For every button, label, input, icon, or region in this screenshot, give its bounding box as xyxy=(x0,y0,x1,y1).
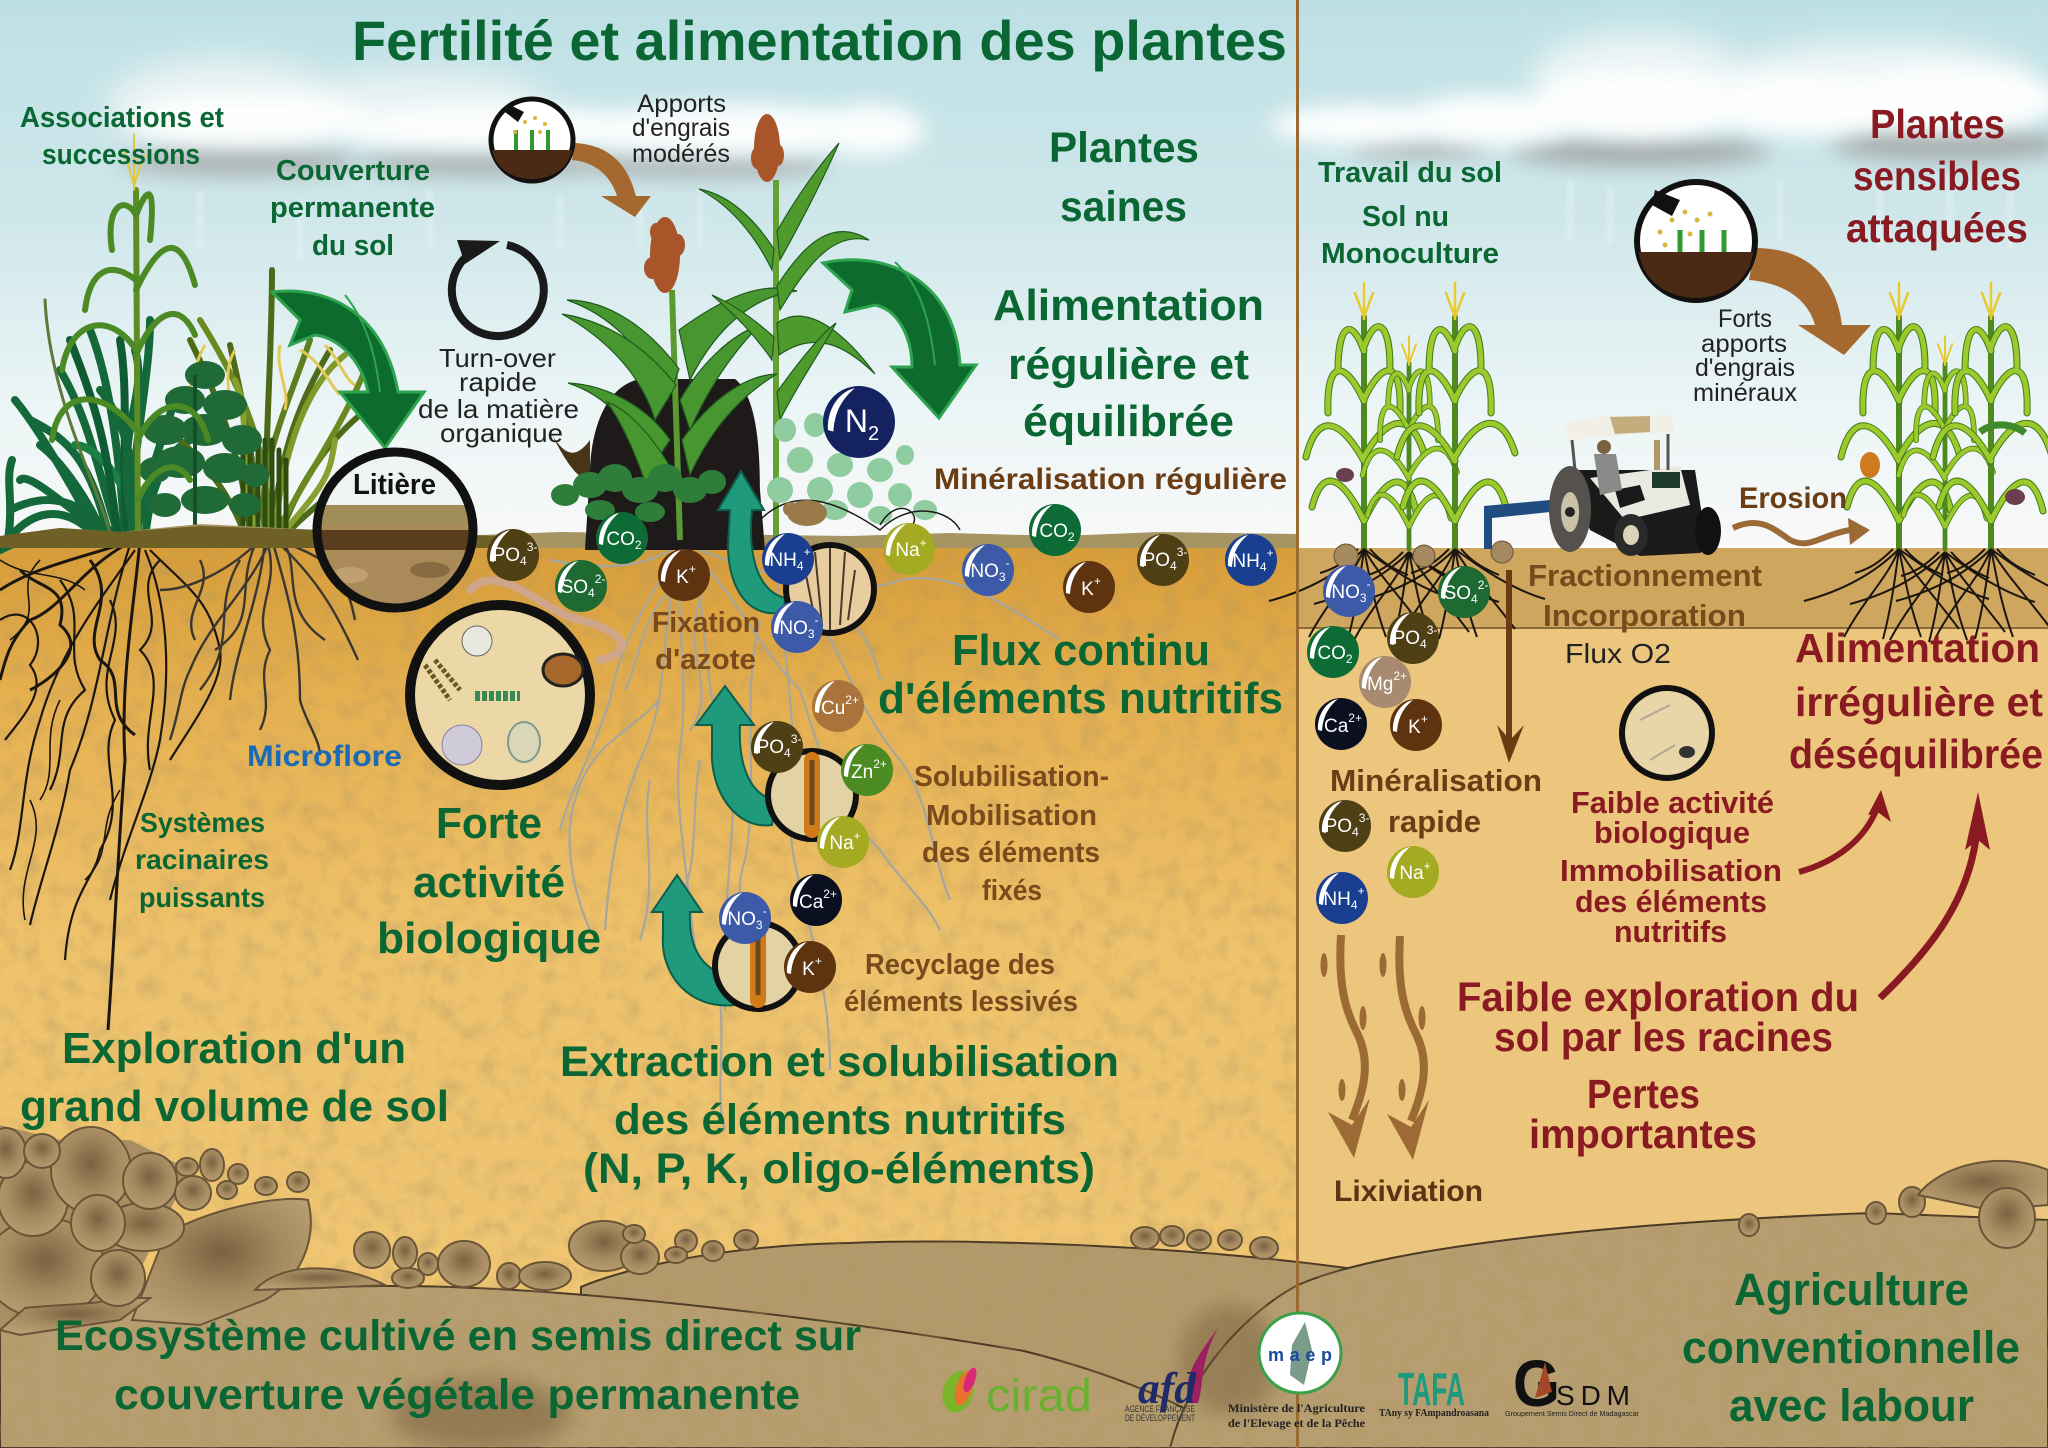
molecule PO4: 3- xyxy=(1177,545,1187,559)
heading: weak exploration xyxy=(1457,974,1859,1060)
label: solubilisation: fixés xyxy=(982,875,1042,907)
label: root systems: Systèmes xyxy=(140,807,265,838)
label: oxygen flux: Flux O2 xyxy=(1565,638,1671,669)
molecule Cu xyxy=(812,680,864,732)
molecule SO4 xyxy=(555,560,607,612)
molecule Na: Na xyxy=(829,833,854,854)
molecule K right xyxy=(1390,699,1442,751)
root circle middle xyxy=(768,751,856,839)
root circle bottom xyxy=(715,923,801,1009)
heading: continuous flux: d'éléments nutritifs xyxy=(878,674,1283,723)
molecule Cu: 2+ xyxy=(845,693,859,707)
turn-over cycle arrow xyxy=(452,240,544,336)
heading: direct seeding ecosystem xyxy=(55,1312,861,1419)
heading: irregular feeding: irrégulière et xyxy=(1795,679,2043,725)
label: weak biological activity: nutritifs xyxy=(1614,914,1727,949)
rain streaks xyxy=(200,175,2010,260)
molecule K: + xyxy=(815,954,822,968)
heading: conventional agriculture xyxy=(1682,1264,2020,1431)
molecule Ca right: Ca xyxy=(1324,716,1348,737)
logo afd xyxy=(1125,1328,1218,1423)
soil background right xyxy=(1297,548,2048,1448)
heading: conventional agriculture: Agriculture xyxy=(1734,1264,1969,1315)
arrow green litter fall xyxy=(272,291,424,448)
label: nitrogen fixation: Fixation xyxy=(652,607,760,639)
molecule K: K xyxy=(802,959,815,980)
label: erosion: Erosion xyxy=(1739,482,1847,515)
label: solubilisation: Solubilisation- xyxy=(914,761,1109,793)
molecule PO4 xyxy=(751,721,803,773)
molecule N2 xyxy=(823,386,895,458)
heading: sensitive plants: sensibles xyxy=(1853,153,2021,199)
soil texture left xyxy=(0,545,1297,1448)
molecule K: + xyxy=(1094,574,1101,588)
logo maep xyxy=(1259,1313,1341,1393)
molecule NO3 right: NO xyxy=(1331,582,1360,603)
label: rapid mineralisation xyxy=(1330,763,1542,839)
molecule NO3 right xyxy=(1323,565,1375,617)
label: soil cover: du sol xyxy=(312,230,394,262)
label: tillage effects xyxy=(1528,558,1762,633)
label: moderate fertiliser xyxy=(632,90,730,168)
molecule K xyxy=(784,941,836,993)
litter circle xyxy=(313,452,477,625)
label: root systems: racinaires xyxy=(135,844,269,875)
label: weak biological activity: biologique xyxy=(1594,815,1750,850)
heading: major losses xyxy=(1529,1071,1757,1157)
molecule NH4 xyxy=(1225,534,1277,586)
label: turn-over: de la matière xyxy=(418,394,579,424)
molecule PO4: 3- xyxy=(791,732,801,746)
label: tillage: Sol nu xyxy=(1362,201,1449,233)
molecule Ca right xyxy=(1315,698,1367,750)
label: tillage effects: Incorporation xyxy=(1543,598,1746,633)
molecule NH4: 4 xyxy=(797,559,804,573)
molecule NO3: NO xyxy=(779,618,808,639)
molecule SO4 right xyxy=(1438,566,1490,618)
heading: healthy plants: Plantes xyxy=(1049,124,1199,172)
molecule PO4: 3- xyxy=(527,540,537,554)
molecule CO2 right: CO xyxy=(1317,643,1346,664)
molecule K: K xyxy=(676,567,689,588)
label: weak biological activity xyxy=(1560,785,1782,949)
logo cirad: cirad xyxy=(986,1369,1092,1421)
molecule SO4 right: 2- xyxy=(1478,578,1488,592)
heading: soil exploration: Exploration d'un xyxy=(62,1024,406,1073)
molecule Zn: 2+ xyxy=(873,757,887,771)
grey roots centre xyxy=(550,545,1060,1130)
molecule CO2 xyxy=(1029,504,1081,556)
label: heavy fertiliser: apports xyxy=(1701,330,1787,358)
heading: soil exploration xyxy=(20,1024,449,1131)
molecule Ca xyxy=(790,874,842,926)
label: microflora: Microflore xyxy=(247,740,402,773)
root circle top xyxy=(786,545,874,633)
molecule PO4 right xyxy=(1387,612,1439,664)
molecule SO4: 4 xyxy=(588,586,595,600)
logo cirad xyxy=(938,1366,1092,1421)
molecule K right: K xyxy=(1408,717,1421,738)
logo GSDM: G xyxy=(1513,1346,1560,1420)
heading: major losses: Pertes xyxy=(1587,1071,1700,1117)
molecule PO4 right: 3- xyxy=(1427,623,1437,637)
molecule CO2 xyxy=(596,512,648,564)
label: nitrogen fixation: d'azote xyxy=(655,644,756,676)
molecule Ca: 2+ xyxy=(823,887,837,901)
heading: conventional agriculture: conventionnelle xyxy=(1682,1322,2020,1373)
molecule Ca right: 2+ xyxy=(1348,711,1362,725)
molecule K right: + xyxy=(1421,712,1428,726)
sorghum leaves front xyxy=(562,288,797,500)
molecule SO4: 2- xyxy=(595,572,605,586)
molecule PO4 right: 4 xyxy=(1420,637,1427,651)
molecule NO3 xyxy=(962,544,1014,596)
insects on maize xyxy=(1336,425,2025,505)
molecule NH4: + xyxy=(804,545,811,559)
root system left xyxy=(0,540,221,1030)
molecule PO4 right lower: 4 xyxy=(1352,825,1359,839)
tractor xyxy=(1484,415,1721,556)
heading: irregular feeding: déséquilibrée xyxy=(1789,731,2043,777)
maize group right field xyxy=(1269,283,1545,642)
molecule Cu: Cu xyxy=(821,698,845,719)
soil background left xyxy=(0,540,1297,1448)
molecule SO4 right: SO xyxy=(1444,583,1471,604)
heading: extraction: Extraction et solubilisation xyxy=(560,1038,1119,1086)
grass tuft left xyxy=(0,300,190,550)
molecule NO3 xyxy=(771,601,823,653)
label: weak biological activity: Faible activité xyxy=(1571,785,1774,820)
molecule NO3 xyxy=(719,892,771,944)
molecule PO4: 4 xyxy=(784,746,791,760)
label: associations: successions xyxy=(42,139,200,171)
label: rapid mineralisation: rapide xyxy=(1388,804,1481,839)
cloud left xyxy=(105,57,925,177)
label: soil cover xyxy=(270,155,435,262)
label: turn-over: rapide xyxy=(459,367,537,397)
heading: healthy plants: saines xyxy=(1060,183,1187,231)
label: weak biological activity: des éléments xyxy=(1575,884,1767,919)
molecule Na right lower: Na xyxy=(1399,863,1424,884)
molecule Zn: Zn xyxy=(851,762,873,783)
label: litter: Litière xyxy=(353,469,436,501)
sorghum panicle rear xyxy=(751,114,784,182)
molecule NO3: 3 xyxy=(999,570,1006,584)
label: rapid mineralisation: Minéralisation xyxy=(1330,763,1542,798)
heading: extraction xyxy=(560,1038,1119,1193)
label: recycling xyxy=(844,949,1078,1018)
logo afd: afd xyxy=(1138,1364,1197,1413)
logo TAFA xyxy=(1379,1363,1489,1419)
molecule NO3: NO xyxy=(970,561,999,582)
earthworm xyxy=(470,581,622,660)
label: turn-over: organique xyxy=(440,418,563,448)
arrow brown heavy fertiliser xyxy=(1749,248,1871,355)
molecule CO2 right: 2 xyxy=(1346,652,1353,666)
molecule K: K xyxy=(1081,579,1094,600)
molecule PO4 right lower xyxy=(1319,800,1371,852)
molecule NH4: NH xyxy=(769,550,797,571)
label: heavy fertiliser: minéraux xyxy=(1693,379,1797,407)
molecule NO3: 3 xyxy=(808,627,815,641)
molecule CO2 right xyxy=(1307,626,1359,678)
heading: sensitive plants: attaquées xyxy=(1846,205,2028,251)
sorghum leaves rear xyxy=(699,143,875,420)
logo GSDM: SDM xyxy=(1556,1380,1630,1411)
molecule PO4: PO xyxy=(1143,550,1170,571)
heading: sensitive plants xyxy=(1846,101,2028,251)
label: heavy fertiliser: d'engrais xyxy=(1695,354,1795,382)
molecule NH4: 4 xyxy=(1260,560,1267,574)
molecule Mg right: Mg xyxy=(1367,674,1393,695)
molecule NH4 right lower: + xyxy=(1358,884,1365,898)
root system rice xyxy=(160,540,358,755)
title: Fertilité et alimentation des plantes xyxy=(352,9,1287,72)
molecule N2: N xyxy=(845,403,868,439)
soil fauna circle xyxy=(1622,688,1712,778)
molecule SO4 right: 4 xyxy=(1471,592,1478,606)
heading: regular feeding: régulière et xyxy=(1008,340,1249,389)
arrow down mineralisation xyxy=(1497,570,1524,763)
heading: major losses: importantes xyxy=(1529,1111,1757,1157)
molecule K xyxy=(658,549,710,601)
label: heavy fertiliser xyxy=(1693,305,1797,407)
label: associations: Associations et xyxy=(20,102,224,134)
heading: healthy plants xyxy=(1049,124,1199,231)
heading: extraction: (N, P, K, oligo-éléments) xyxy=(583,1145,1095,1193)
label: soil cover: Couverture xyxy=(276,155,430,187)
fertiliser circle right xyxy=(1637,182,1755,300)
heading: direct seeding ecosystem: Ecosystème cultivé en semis direct sur xyxy=(55,1312,861,1360)
molecule Na: + xyxy=(920,536,927,550)
cloud right xyxy=(1270,32,2048,166)
rocks left xyxy=(0,1125,1278,1335)
label: turn-over: Turn-over xyxy=(439,343,556,373)
heading: strong biological activity: Forte xyxy=(436,799,542,848)
ground litter strip xyxy=(0,524,1297,548)
divider between systems xyxy=(1296,0,1299,1448)
molecule NH4 xyxy=(762,533,814,585)
heading: conventional agriculture: avec labour xyxy=(1729,1380,1974,1431)
heading: irregular feeding xyxy=(1789,625,2043,777)
label: leaching: Lixiviation xyxy=(1334,1175,1483,1208)
label: recycling: éléments lessivés xyxy=(844,986,1078,1018)
molecule Zn xyxy=(841,744,893,796)
molecule N2: 2 xyxy=(868,423,879,445)
molecule PO4 right lower: 3- xyxy=(1359,811,1369,825)
molecule CO2: CO xyxy=(1039,521,1068,542)
molecule NO3: - xyxy=(815,613,819,627)
mouse xyxy=(783,500,827,526)
molecule Mg right xyxy=(1359,656,1411,708)
rice plant xyxy=(170,270,365,535)
molecule NH4: NH xyxy=(1232,551,1260,572)
molecule CO2: 2 xyxy=(635,538,642,552)
heading: extraction: des éléments nutritifs xyxy=(614,1096,1066,1144)
heading: weak exploration: sol par les racines xyxy=(1494,1014,1833,1060)
molecule SO4: SO xyxy=(561,577,588,598)
ministry caption: Ministère de l'Agriculture xyxy=(1228,1401,1366,1415)
fertiliser circle left xyxy=(491,99,573,181)
label: solubilisation xyxy=(914,761,1109,907)
molecule PO4: 4 xyxy=(1170,559,1177,573)
rice panicles xyxy=(180,345,355,415)
molecule Na right lower: + xyxy=(1424,859,1431,873)
red arrow large xyxy=(1880,792,1990,998)
molecule NH4 right lower xyxy=(1316,872,1368,924)
molecule NO3 right: 3 xyxy=(1360,591,1367,605)
label: heavy fertiliser: Forts xyxy=(1718,305,1772,333)
label: soil cover: permanente xyxy=(270,192,435,224)
molecule PO4: PO xyxy=(757,737,784,758)
label: moderate fertiliser: modérés xyxy=(632,140,730,168)
molecule NO3: 3 xyxy=(756,918,763,932)
label: tillage effects: Fractionnement xyxy=(1528,558,1762,593)
logo GSDM xyxy=(1505,1346,1639,1420)
molecule Na: + xyxy=(854,829,861,843)
molecule CO2: CO xyxy=(606,529,635,550)
label: tillage: Travail du sol xyxy=(1318,157,1502,189)
sorghum stems xyxy=(672,180,776,540)
molecule Na xyxy=(817,816,869,868)
ministry caption xyxy=(1228,1401,1366,1430)
molecule NH4 right lower: NH xyxy=(1323,889,1351,910)
label: turn-over xyxy=(418,343,579,448)
molecule PO4: PO xyxy=(493,545,520,566)
arrow green nutrition xyxy=(823,260,976,418)
heading: continuous flux: Flux continu xyxy=(952,626,1210,675)
heading: weak exploration: Faible exploration du xyxy=(1457,974,1859,1020)
heading: regular feeding: équilibrée xyxy=(1023,397,1234,446)
molecule PO4: 4 xyxy=(520,554,527,568)
leaching arrows xyxy=(1320,935,1429,1160)
sky background xyxy=(0,0,2048,545)
label: moderate fertiliser: d'engrais xyxy=(632,114,730,142)
molecule NO3: NO xyxy=(727,909,756,930)
logo afd: AGENCE FRANÇAISE xyxy=(1125,1404,1195,1414)
molecule NO3 right: - xyxy=(1367,577,1371,591)
molecule K xyxy=(1063,561,1115,613)
molecule CO2: 2 xyxy=(1068,530,1075,544)
microflora circle xyxy=(410,605,590,785)
label: solubilisation: des éléments xyxy=(922,837,1100,869)
logo TAFA: TAFA xyxy=(1398,1363,1465,1415)
heading: direct seeding ecosystem: couverture végétale permanente xyxy=(114,1371,800,1419)
molecule Ca: Ca xyxy=(799,892,823,913)
arrow brown moderate fertiliser xyxy=(572,143,651,217)
hills at bottom xyxy=(0,1213,2048,1448)
erosion arrow xyxy=(1733,518,1870,545)
molecule Na xyxy=(883,523,935,575)
label: regular mineralisation: Minéralisation régulière xyxy=(934,463,1287,496)
molecule Na: Na xyxy=(895,540,920,561)
heading: regular feeding xyxy=(993,281,1264,446)
molecule NO3: - xyxy=(763,904,767,918)
vine leaves bush xyxy=(551,413,960,530)
molecule K: + xyxy=(689,562,696,576)
maize plant left xyxy=(52,134,208,545)
sorghum panicle front xyxy=(644,217,685,293)
molecule NO3: - xyxy=(1006,556,1010,570)
molecule Mg right: 2+ xyxy=(1393,669,1407,683)
label: nitrogen fixation xyxy=(652,607,760,676)
label: associations xyxy=(20,102,224,171)
rocks right xyxy=(1739,1161,2048,1248)
heading: regular feeding: Alimentation xyxy=(993,281,1264,330)
logo afd: DE DÉVELOPPEMENT xyxy=(1125,1413,1195,1423)
heading: strong biological activity: biologique xyxy=(377,914,601,963)
heading: continuous flux xyxy=(878,626,1283,723)
heading: sensitive plants: Plantes xyxy=(1870,101,2005,147)
label: root systems xyxy=(135,807,269,913)
logo GSDM: Groupement Semis Direct de Madagascar xyxy=(1505,1409,1639,1418)
molecule PO4 right lower: PO xyxy=(1325,816,1352,837)
label: moderate fertiliser: Apports xyxy=(637,90,726,118)
clods on right surface xyxy=(1334,541,1513,568)
cow behind plants xyxy=(552,379,765,550)
label: root systems: puissants xyxy=(139,882,265,913)
molecule Na right lower xyxy=(1387,846,1439,898)
label: solubilisation: Mobilisation xyxy=(926,800,1097,832)
red arrow small xyxy=(1799,790,1891,872)
heading: soil exploration: grand volume de sol xyxy=(20,1082,449,1131)
logo TAFA: TAny sy FAmpandroasana xyxy=(1379,1408,1489,1419)
maize group attacked xyxy=(1804,283,2048,642)
heading: strong biological activity: activité xyxy=(413,858,565,907)
soybean bush xyxy=(139,361,269,540)
molecule PO4 xyxy=(487,529,539,581)
label: tillage: Monoculture xyxy=(1321,238,1499,270)
molecule PO4 right: PO xyxy=(1393,628,1420,649)
teal arrows xyxy=(652,471,785,1005)
molecule NH4 right lower: 4 xyxy=(1351,898,1358,912)
label: recycling: Recyclage des xyxy=(865,949,1055,981)
ministry caption: de l'Elevage et de la Pêche xyxy=(1228,1416,1366,1430)
heading: strong biological activity xyxy=(377,799,601,963)
label: tillage xyxy=(1318,157,1502,270)
label: weak biological activity: Immobilisation xyxy=(1560,853,1782,888)
heading: irregular feeding: Alimentation xyxy=(1795,625,2040,671)
molecule NH4: + xyxy=(1267,546,1274,560)
molecule PO4 xyxy=(1137,534,1189,586)
logo maep: maep xyxy=(1268,1345,1332,1365)
